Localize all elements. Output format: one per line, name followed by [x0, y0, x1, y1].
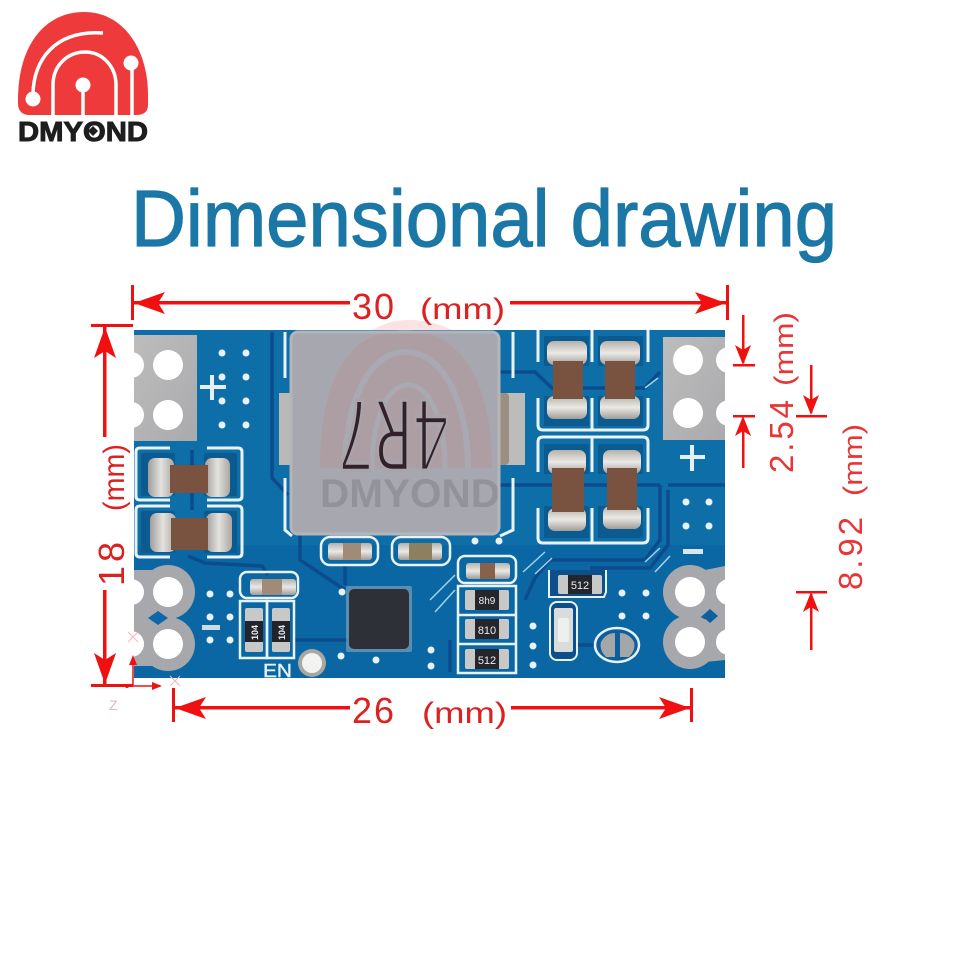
- dimension: 2.54 mm pin pitch: 2.54: [763, 400, 800, 473]
- resistor column: 8h9: [479, 596, 496, 607]
- inductor body: [291, 332, 499, 534]
- dimension: 2.54 mm pin pitch: (mm): [769, 312, 799, 386]
- right top pad: [663, 337, 742, 440]
- logo dome: [18, 12, 148, 115]
- EN test pad: [298, 649, 326, 677]
- right capacitor silkscreen: [538, 330, 648, 543]
- dimension: 26 mm width: 26: [352, 690, 394, 731]
- dimension: 26 mm width: (mm): [422, 697, 507, 730]
- coordinate axes marker: [109, 632, 180, 713]
- lower right pads: [663, 565, 742, 669]
- resistor column: 512: [478, 655, 496, 667]
- dimension: 8.92 mm offset: (mm): [838, 424, 868, 496]
- inductor: [279, 330, 525, 534]
- via grid and plus marking, top left: [200, 350, 250, 428]
- inductor silkscreen lines: [285, 332, 513, 536]
- QFN chip: [346, 586, 412, 652]
- title: Dimensional drawing: [131, 174, 837, 263]
- small capacitor and resistors, lower left: 104: [250, 625, 260, 640]
- dimension: 30 mm width: (mm): [420, 293, 505, 326]
- dark copper traces: [188, 332, 725, 672]
- watermark dome: [320, 330, 492, 468]
- inductor marking 4R7: 4R7: [337, 367, 450, 488]
- dimension: 18 mm height: (mm): [98, 444, 131, 511]
- watermark text: DMYOND: [320, 472, 500, 516]
- inductor side tabs: [279, 393, 294, 465]
- logo: DMYOND: [18, 12, 148, 147]
- coordinate axes marker: Z: [109, 697, 118, 713]
- resistor column: [458, 556, 516, 673]
- small capacitor and resistors, lower left: 104: [277, 625, 287, 640]
- dimension: 18 mm height: [91, 324, 133, 687]
- dimension: 30 mm width: [131, 285, 729, 327]
- LED: [550, 602, 577, 660]
- left capacitor silkscreen: [136, 448, 242, 557]
- logo wordmark: DMYOND: [18, 116, 148, 147]
- dimension: 18 mm height: 18: [91, 542, 132, 586]
- right plus marking: [680, 445, 705, 471]
- vias around chip: [338, 538, 650, 670]
- resistor 512: 512: [571, 580, 589, 592]
- resistor column: 810: [478, 625, 496, 637]
- watermark tip above board: [372, 320, 452, 330]
- resistor 512: [549, 570, 606, 597]
- dimension: 30 mm width: 30: [352, 286, 394, 327]
- left top pad: [118, 335, 197, 441]
- right vias and minus marking: [682, 498, 712, 554]
- dimension: 8.92 mm offset: [796, 365, 869, 650]
- light trace highlights: [430, 378, 670, 612]
- vias and minus marking, lower left: [202, 590, 234, 644]
- lower left pads: [118, 565, 195, 671]
- right capacitors: [544, 336, 643, 538]
- board base: [134, 330, 725, 678]
- dimension: 8.92 mm offset: 8.92: [832, 517, 869, 590]
- solder jumper: [595, 628, 639, 662]
- left capacitors: [141, 453, 237, 553]
- small capacitor and resistors, lower left: [240, 572, 298, 658]
- capacitors below inductor: [321, 537, 450, 565]
- dimension: 2.54 mm pin pitch: [733, 312, 800, 473]
- EN label: EN: [263, 661, 292, 681]
- panel: circuit board photo: [118, 330, 742, 681]
- dimension: 26 mm width: [172, 688, 693, 731]
